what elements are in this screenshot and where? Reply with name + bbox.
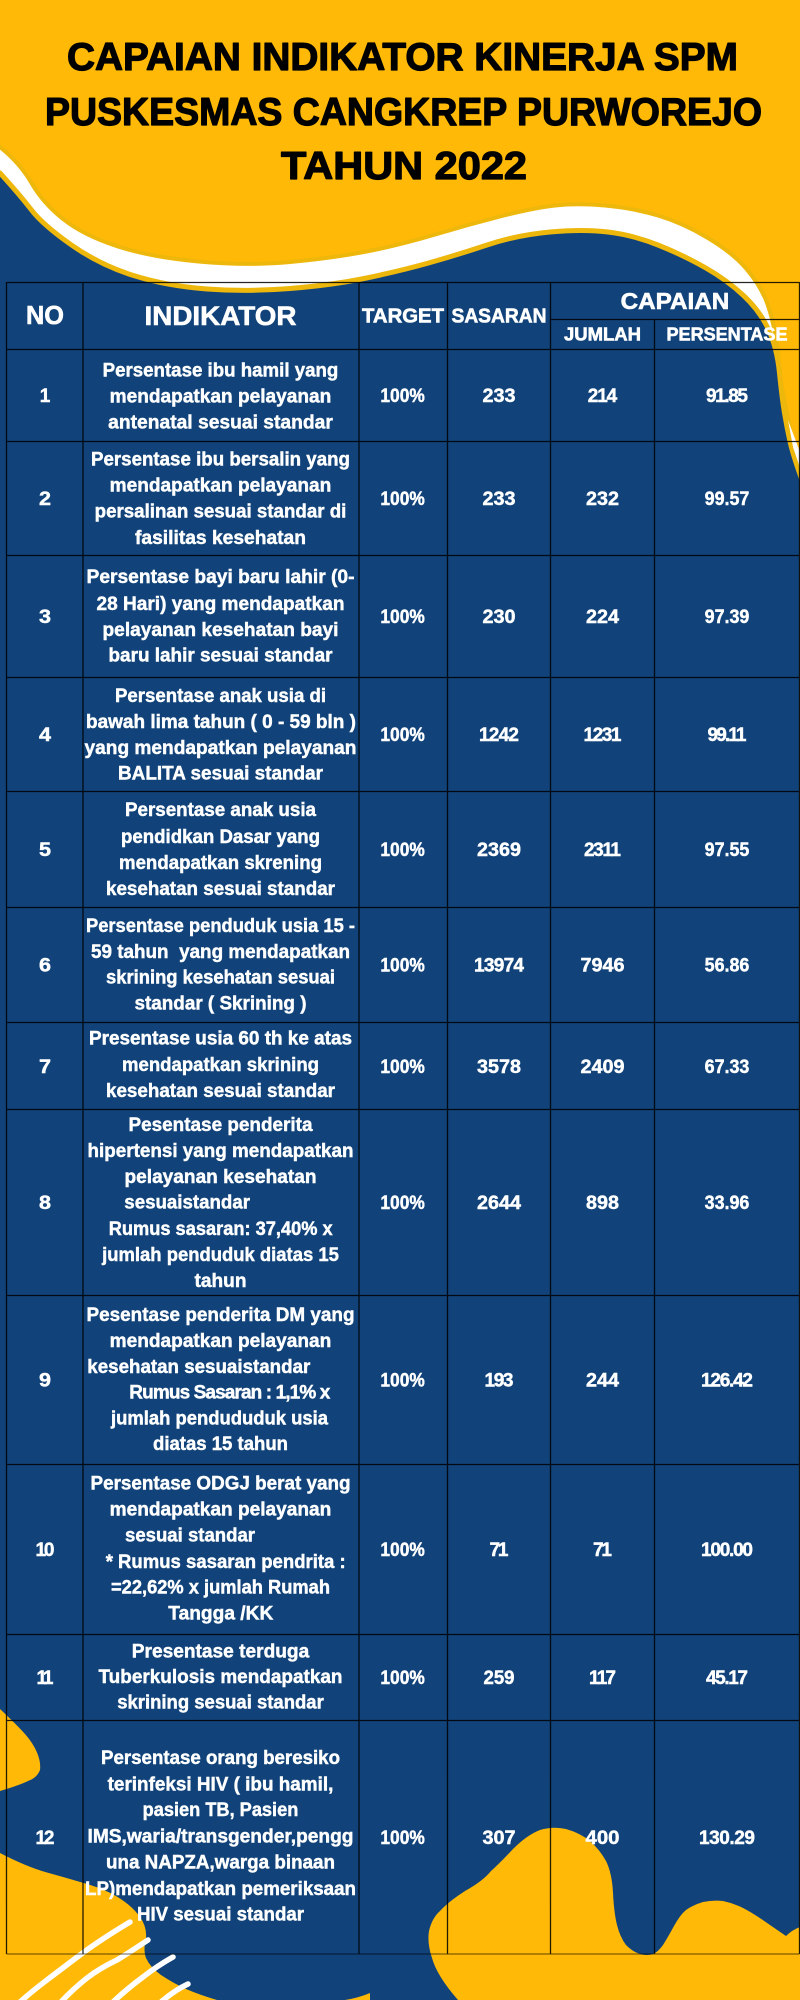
row 5: 100%: [380, 840, 425, 861]
row 3 indicator: 28 Hari) yang mendapatkan: [96, 594, 344, 615]
table header: JUMLAH: [564, 325, 641, 345]
row 4 indicator: bawah lima tahun ( 0 - 59 bln ): [86, 712, 356, 733]
row 7 indicator: kesehatan sesuai standar: [106, 1081, 336, 1102]
row 1 indicator: [103, 361, 338, 434]
row 3: 3: [39, 607, 51, 628]
table header: SASARAN: [452, 306, 546, 328]
row 5: 2311: [584, 840, 621, 861]
row 7 indicator: mendapatkan skrining: [122, 1055, 319, 1076]
row 10 indicator: [90, 1474, 350, 1624]
row 12 indicator: IMS,waria/transgender,pengg: [88, 1826, 354, 1848]
row 5: 5: [39, 840, 51, 861]
title: CAPAIAN INDIKATOR KINERJA SPM: [67, 36, 738, 79]
row 11: 117: [589, 1668, 616, 1689]
row 1 indicator: Persentase ibu hamil yang: [103, 361, 338, 382]
row 6 indicator: 59 tahun yang mendapatkan: [91, 942, 350, 963]
row 8: 898: [586, 1193, 619, 1214]
row 12 indicator: terinfeksi HIV ( ibu hamil,: [108, 1774, 333, 1796]
row 7: 3578: [477, 1057, 521, 1078]
row 3: 224: [586, 607, 619, 628]
row 12 indicator: Persentase orang beresiko: [101, 1748, 340, 1769]
row 8: 8: [39, 1193, 51, 1214]
row 9 indicator: diatas 15 tahun: [153, 1434, 288, 1455]
row 1: 100%: [380, 386, 425, 407]
row 9: 126.42: [701, 1370, 753, 1392]
row 10 indicator: =22,62% x jumlah Rumah: [111, 1578, 330, 1598]
row 2: 99.57: [705, 489, 749, 510]
row 10: 100%: [380, 1540, 425, 1561]
row 8: 100%: [380, 1193, 425, 1214]
row 4: 4: [39, 725, 51, 746]
row 2: 233: [482, 489, 516, 510]
row 1: [40, 361, 748, 434]
row 2 indicator: persalinan sesuai standar di: [95, 502, 346, 523]
row 10: 71: [593, 1540, 612, 1561]
row 6 indicator: skrining kesehatan sesuai: [106, 968, 335, 988]
title: [45, 36, 762, 188]
row 4: [39, 686, 747, 784]
row 8 indicator: [88, 1115, 354, 1292]
row 7: [39, 1028, 749, 1102]
row 5: 97.55: [705, 840, 750, 861]
row 6: 7946: [580, 956, 624, 976]
row 6: 6: [39, 956, 51, 976]
row 4 indicator: BALITA sesuai standar: [118, 764, 324, 784]
row 10: [36, 1474, 753, 1624]
row 1 indicator: antenatal sesuai standar: [108, 412, 333, 434]
row 12 indicator: [85, 1748, 356, 1926]
row 7 indicator: Presentase usia 60 th ke atas: [89, 1028, 352, 1050]
row 8 indicator: tahun: [194, 1271, 246, 1292]
row 4 indicator: [84, 686, 356, 784]
row 6: 100%: [380, 956, 425, 976]
row 1: 233: [482, 386, 516, 407]
row 5 indicator: pendidkan Dasar yang: [121, 827, 320, 848]
table header: NO: [26, 300, 64, 330]
row 8 indicator: Pesentase penderita: [128, 1115, 313, 1136]
row 7: 2409: [580, 1057, 624, 1078]
row 5 indicator: [106, 800, 336, 900]
row 2: 2: [39, 489, 51, 510]
row 8 indicator: sesuaistandar: [124, 1192, 251, 1214]
row 1: 214: [588, 386, 618, 407]
row 2 indicator: Persentase ibu bersalin yang: [91, 450, 350, 471]
row 2 indicator: [91, 450, 350, 549]
row 12 indicator: HIV sesuai standar: [137, 1904, 305, 1926]
row 7 indicator: [89, 1028, 352, 1102]
row 6: [39, 916, 749, 1014]
title: PUSKESMAS CANGKREP PURWOREJO: [45, 91, 762, 134]
row 12 indicator: pasien TB, Pasien: [143, 1800, 298, 1821]
row 2: 100%: [380, 489, 425, 510]
row 10: 100.00: [701, 1540, 753, 1561]
row 4 indicator: Persentase anak usia di: [115, 686, 326, 707]
row 4: 99.11: [708, 725, 747, 746]
row 11 indicator: Presentase terduga: [132, 1642, 310, 1662]
row 6: 13974: [474, 956, 524, 976]
row 12 indicator: una NAPZA,warga binaan: [106, 1852, 335, 1874]
row 9: 100%: [380, 1370, 425, 1392]
row 5 indicator: Persentase anak usia: [125, 800, 316, 821]
row 4: 1242: [479, 725, 519, 746]
row 9 indicator: Pesentase penderita DM yang: [86, 1305, 354, 1326]
row 9: 193: [484, 1370, 514, 1392]
row 7: 67.33: [705, 1057, 749, 1078]
row 8 indicator: Rumus sasaran: 37,40% x: [109, 1219, 333, 1240]
row 12: 100%: [380, 1828, 425, 1849]
row 10: 71: [490, 1540, 509, 1561]
row 9: 244: [586, 1370, 619, 1392]
row 6: 56.86: [705, 956, 749, 976]
row 7: 7: [39, 1057, 51, 1078]
row 2 indicator: fasilitas kesehatan: [135, 528, 306, 549]
row 3: 97.39: [705, 607, 749, 628]
decorative white brush strokes: [20, 1922, 188, 2000]
row 3: [39, 567, 749, 666]
decorative blob: bottom left lower: [0, 1853, 217, 2000]
row 5 indicator: mendapatkan skrening: [119, 853, 322, 874]
row 10 indicator: Tangga /KK: [168, 1604, 274, 1624]
row 5: 2369: [477, 840, 521, 861]
row 5: [39, 800, 750, 900]
row 12: 400: [586, 1828, 620, 1849]
row 10: 10: [36, 1540, 54, 1561]
row 12: 130.29: [699, 1828, 755, 1849]
row 4: 100%: [380, 725, 425, 746]
row 8: 33.96: [705, 1193, 749, 1214]
row 7: 100%: [380, 1057, 425, 1078]
row 11: [36, 1642, 748, 1714]
row 11: 259: [484, 1668, 514, 1689]
table header: [26, 288, 788, 345]
row 3 indicator: Persentase bayi baru lahir (0-: [86, 567, 354, 588]
row 3: 230: [482, 607, 516, 628]
row 12 indicator: LP)mendapatkan pemeriksaan: [85, 1879, 356, 1900]
row 9 indicator: [86, 1305, 354, 1455]
table header: PERSENTASE: [666, 325, 788, 345]
title: TAHUN 2022: [281, 145, 527, 188]
row 11 indicator: Tuberkulosis mendapatkan: [98, 1667, 342, 1688]
row 9 indicator: mendapatkan pelayanan: [110, 1331, 331, 1352]
row 10 indicator: Persentase ODGJ berat yang: [90, 1474, 350, 1494]
row 9 indicator: kesehatan sesuaistandar: [87, 1357, 311, 1378]
decorative blob: bottom sliver: [345, 1993, 370, 2000]
row 8: [39, 1115, 749, 1292]
row 9: [39, 1305, 753, 1455]
row 11: 45.17: [706, 1668, 748, 1689]
row 1 indicator: mendapatkan pelayanan: [110, 386, 331, 408]
table header: TARGET: [362, 306, 444, 328]
row 12: 307: [482, 1828, 516, 1849]
row 6 indicator: Persentase penduduk usia 15 -: [86, 916, 355, 937]
row 2: [39, 450, 749, 549]
row 11 indicator: skrining sesuai standar: [117, 1692, 324, 1714]
row 8 indicator: hipertensi yang mendapatkan: [88, 1141, 354, 1162]
row 11 indicator: [98, 1642, 342, 1714]
row 9: 9: [39, 1370, 51, 1392]
row 10 indicator: mendapatkan pelayanan: [110, 1500, 331, 1520]
row 11: 11: [36, 1668, 54, 1689]
row 8 indicator: pelayanan kesehatan: [124, 1167, 316, 1188]
decorative blob: bottom left upper: [0, 1709, 40, 1791]
row 6 indicator: standar ( Skrining ): [134, 994, 306, 1014]
row 3 indicator: pelayanan kesehatan bayi: [102, 620, 338, 641]
row 6 indicator: [86, 916, 355, 1014]
row 8: 2644: [477, 1193, 521, 1214]
row 3: 100%: [380, 607, 425, 628]
row 10 indicator: sesuai standar: [125, 1526, 256, 1546]
row 10 indicator: * Rumus sasaran pendrita :: [106, 1552, 346, 1573]
row 12: 12: [36, 1828, 54, 1849]
row 3 indicator: baru lahir sesuai standar: [108, 646, 333, 666]
row 9 indicator: jumlah pendududuk usia: [110, 1408, 328, 1430]
table header: INDIKATOR: [144, 301, 296, 331]
row 4 indicator: yang mendapatkan pelayanan: [84, 738, 356, 759]
row 12: [36, 1748, 755, 1926]
decorative blob: bottom right hills: [428, 1828, 800, 2000]
row 11: 100%: [380, 1668, 425, 1689]
row 4: 1231: [584, 725, 622, 746]
row 5 indicator: kesehatan sesuai standar: [106, 879, 336, 900]
row 3 indicator: [86, 567, 354, 666]
row 9 indicator: Rumus Sasaran : 1,1% x: [129, 1382, 331, 1404]
row 2 indicator: mendapatkan pelayanan: [110, 476, 331, 496]
row 1: 91.85: [706, 386, 748, 407]
row 8 indicator: jumlah penduduk diatas 15: [101, 1245, 339, 1266]
row 2: 232: [586, 489, 619, 510]
table header: CAPAIAN: [621, 288, 729, 314]
row 1: 1: [40, 386, 51, 407]
